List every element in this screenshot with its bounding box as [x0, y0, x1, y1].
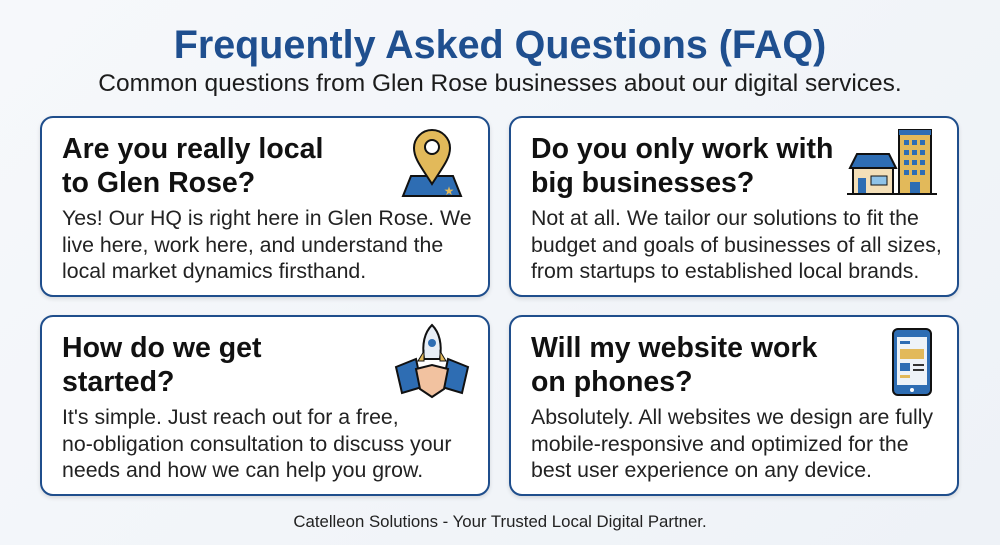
heading: Do you only work with	[531, 133, 833, 165]
icon: map pin	[402, 129, 462, 198]
icon: phone	[892, 328, 932, 396]
heading	[62, 332, 262, 398]
body text: best user experience on any device.	[531, 458, 872, 482]
heading: to Glen Rose?	[62, 167, 255, 199]
body text: from startups to established local brands.	[531, 259, 919, 283]
body text: budget and goals of businesses of all sizes,	[531, 232, 942, 256]
heading	[531, 332, 818, 398]
body text: needs and how we can help you grow.	[62, 458, 423, 482]
body text	[531, 405, 933, 482]
icon: rocket handshake	[394, 324, 470, 398]
body text: It's simple. Just reach out for a free,	[62, 405, 399, 429]
body text: Not at all. We tailor our solutions to fit the	[531, 206, 919, 230]
body text: Yes! Our HQ is right here in Glen Rose. We	[62, 206, 472, 230]
body text	[62, 206, 472, 283]
panel: big businesses	[509, 116, 959, 297]
title: Frequently Asked Questions (FAQ)	[174, 23, 826, 67]
panel: phones	[509, 315, 959, 496]
subtitle: Common questions from Glen Rose businesses about our digital services.	[98, 70, 902, 97]
heading: started?	[62, 366, 174, 398]
body text	[531, 206, 942, 283]
panel: get started	[40, 315, 490, 496]
panel: local	[40, 116, 490, 297]
icon: buildings	[847, 129, 937, 195]
body text: Absolutely. All websites we design are fully	[531, 405, 933, 429]
heading	[531, 133, 833, 199]
body text: mobile-responsive and optimized for the	[531, 432, 909, 456]
icon: map pin: ★	[444, 184, 454, 198]
body text: live here, work here, and understand the	[62, 232, 443, 256]
heading: Will my website work	[531, 332, 817, 364]
footer: Catelleon Solutions - Your Trusted Local Digital Partner.	[293, 512, 707, 531]
heading: big businesses?	[531, 167, 754, 199]
body text: no-obligation consultation to discuss your	[62, 432, 452, 456]
heading: How do we get	[62, 332, 262, 364]
heading: on phones?	[531, 366, 692, 398]
heading: Are you really local	[62, 133, 323, 165]
heading	[62, 133, 323, 199]
body text	[62, 405, 452, 482]
body text: local market dynamics firsthand.	[62, 259, 366, 283]
